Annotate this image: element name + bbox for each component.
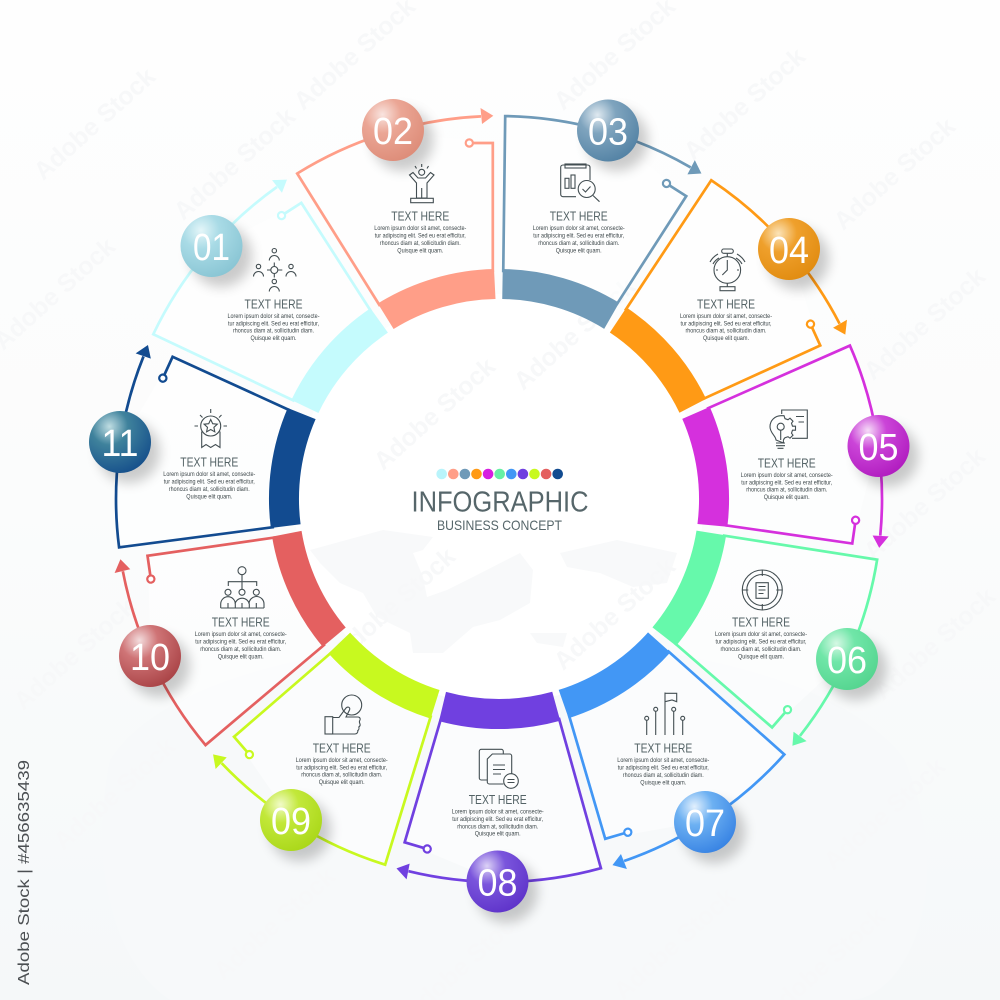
ball 10 xyxy=(119,625,190,697)
icon: people network xyxy=(254,248,296,292)
text block 06 xyxy=(715,616,807,660)
panel 06 xyxy=(630,458,927,752)
text block 07: tur adipiscing elit. Sed eu erat efficitur, xyxy=(618,765,709,772)
text block 04: Lorem ipsum dolor sit amet, consecte- xyxy=(680,313,772,320)
text block 05: rhoncus diam at, sollicitudin diam. xyxy=(746,487,827,494)
panel 10 outline and band xyxy=(112,527,359,754)
watermark: Adobe Stock xyxy=(329,542,461,666)
text block 10: tur adipiscing elit. Sed eu erat efficitur, xyxy=(195,639,286,646)
panel 02 outline and band xyxy=(297,108,496,329)
text block 08: tur adipiscing elit. Sed eu erat efficitur, xyxy=(452,816,543,823)
text block 01: Lorem ipsum dolor sit amet, consecte- xyxy=(228,313,320,320)
ball 05 xyxy=(848,415,918,487)
icon: winner on podium xyxy=(410,164,434,203)
watermark: Adobe Stock xyxy=(859,262,991,386)
text block 06: tur adipiscing elit. Sed eu erat efficitur, xyxy=(716,639,807,646)
watermark: Adobe Stock xyxy=(29,62,161,186)
text block 08: TEXT HERE xyxy=(469,793,527,807)
text block 06: rhoncus diam at, sollicitudin diam. xyxy=(720,646,802,653)
text block 03: rhoncus diam at, sollicitudin diam. xyxy=(538,240,619,247)
panel 07 xyxy=(550,605,803,873)
text block 01: rhoncus diam at, sollicitudin diam. xyxy=(233,328,314,335)
text block 11: Quisque elit quam. xyxy=(186,493,233,500)
ball 11: 11 xyxy=(102,423,138,465)
panel 04 outline and band xyxy=(570,153,853,425)
panel 02 xyxy=(297,99,496,329)
text block 11: tur adipiscing elit. Sed eu erat efficitur, xyxy=(164,479,255,486)
panel 05 xyxy=(668,323,918,551)
text block 08: rhoncus diam at, sollicitudin diam. xyxy=(457,823,538,830)
text block 10: Quisque elit quam. xyxy=(218,653,264,660)
watermark: Adobe Stock xyxy=(49,732,181,856)
text block 09: tur adipiscing elit. Sed eu erat efficitur, xyxy=(296,764,387,771)
colour dots xyxy=(436,469,563,479)
text block 05 xyxy=(741,456,833,501)
text block 03: tur adipiscing elit. Sed eu erat efficitur, xyxy=(533,233,624,240)
heading: INFOGRAPHIC xyxy=(412,486,588,518)
ball 02 xyxy=(362,99,434,171)
watermark: Adobe Stock xyxy=(869,582,1000,706)
text block 10: rhoncus diam at, sollicitudin diam. xyxy=(200,646,281,653)
watermark: Adobe Stock xyxy=(679,42,811,166)
panel 09 outline and band xyxy=(206,613,503,908)
ball 02: 02 xyxy=(373,111,413,153)
watermark: Adobe Stock xyxy=(829,112,961,236)
ball 03 xyxy=(577,100,648,171)
ball 10: 10 xyxy=(130,637,170,679)
ball 03: 03 xyxy=(588,112,628,154)
watermark: Adobe Stock xyxy=(169,102,301,226)
panel 04 xyxy=(570,153,853,425)
panel 07 outline and band xyxy=(550,605,803,873)
watermark: Adobe Stock xyxy=(209,862,341,986)
text block 04 xyxy=(680,297,772,342)
text block 02 xyxy=(374,210,466,254)
text block 11: rhoncus diam at, sollicitudin diam. xyxy=(169,486,250,493)
text block 05: TEXT HERE xyxy=(758,456,816,470)
ball 07 xyxy=(674,791,745,863)
ball 01: 01 xyxy=(193,227,230,269)
text block 09 xyxy=(296,741,388,786)
panel 10 xyxy=(112,527,359,754)
text block 02: tur adipiscing elit. Sed eu erat efficitur, xyxy=(375,233,466,240)
text block 11: Lorem ipsum dolor sit amet, consecte- xyxy=(163,471,255,478)
text block 04: TEXT HERE xyxy=(697,297,755,311)
center title xyxy=(412,469,588,533)
panel 11 outline and band xyxy=(60,340,343,612)
text block 07: rhoncus diam at, sollicitudin diam. xyxy=(623,772,704,779)
text block 07 xyxy=(617,742,709,786)
text block 02: Lorem ipsum dolor sit amet, consecte- xyxy=(374,225,466,232)
text block 09: Lorem ipsum dolor sit amet, consecte- xyxy=(296,757,388,764)
text block 02: rhoncus diam at, sollicitudin diam. xyxy=(380,240,461,247)
icon: bulb with gear xyxy=(770,410,807,448)
ball 01 xyxy=(180,215,252,287)
panel 05 outline and band xyxy=(668,323,915,551)
subheading: BUSINESS CONCEPT xyxy=(437,517,562,533)
icon: thumbs up with coin xyxy=(325,695,362,734)
text block 08 xyxy=(452,793,544,838)
ball 08: 08 xyxy=(478,862,518,904)
text block 01: TEXT HERE xyxy=(244,297,302,311)
text block 04: Quisque elit quam. xyxy=(703,335,749,342)
icon: report with magnifier xyxy=(561,164,600,202)
text block 01 xyxy=(228,297,320,342)
panel 03 outline and band xyxy=(421,61,707,354)
text block 03: Quisque elit quam. xyxy=(556,247,602,254)
ball 05: 05 xyxy=(858,427,898,469)
text block 04: tur adipiscing elit. Sed eu erat efficitur, xyxy=(680,320,772,327)
text block 03: Lorem ipsum dolor sit amet, consecte- xyxy=(533,225,625,232)
text block 09: rhoncus diam at, sollicitudin diam. xyxy=(301,772,382,779)
text block 05: Lorem ipsum dolor sit amet, consecte- xyxy=(741,472,833,479)
panel 06 outline and band xyxy=(630,458,927,752)
stock id label: Adobe Stock | #456635439 xyxy=(16,760,33,985)
panel 09 xyxy=(206,613,503,908)
text block 07: Lorem ipsum dolor sit amet, consecte- xyxy=(617,757,709,764)
ball 04 xyxy=(758,218,829,290)
panel 01 outline and band xyxy=(118,172,404,465)
text block 10: TEXT HERE xyxy=(212,616,270,630)
text block 05: tur adipiscing elit. Sed eu erat efficitur, xyxy=(741,479,832,486)
ball 09 xyxy=(260,789,331,861)
watermark: Adobe Stock xyxy=(369,352,501,476)
text block 08: Lorem ipsum dolor sit amet, consecte- xyxy=(452,808,544,816)
text block 01: Quisque elit quam. xyxy=(250,335,297,342)
ball 06: 06 xyxy=(827,640,867,682)
text block 05: Quisque elit quam. xyxy=(764,494,810,501)
panel 08 xyxy=(392,663,645,931)
icon: team hierarchy xyxy=(221,567,264,608)
text block 10 xyxy=(195,616,287,660)
text block 02: TEXT HERE xyxy=(391,210,449,224)
text block 03: TEXT HERE xyxy=(550,210,608,224)
text block 04: rhoncus diam at, sollicitudin diam. xyxy=(686,328,767,335)
text block 11 xyxy=(163,456,255,500)
ball 06 xyxy=(816,628,887,700)
panel 01 xyxy=(118,172,404,465)
text block 09: TEXT HERE xyxy=(313,741,371,755)
text block 06: TEXT HERE xyxy=(732,616,790,630)
text block 06: Lorem ipsum dolor sit amet, consecte- xyxy=(715,631,807,638)
watermark: Adobe Stock xyxy=(859,442,991,566)
text block 01: tur adipiscing elit. Sed eu erat efficitur, xyxy=(228,320,319,327)
panel 03 xyxy=(421,61,707,354)
watermark: Adobe Stock xyxy=(819,752,951,876)
text block 08: Quisque elit quam. xyxy=(475,831,521,838)
ball 09: 09 xyxy=(271,801,311,843)
ball 07: 07 xyxy=(685,803,725,845)
icon: milestones with flag xyxy=(645,692,685,735)
watermark: Adobe Stock xyxy=(549,552,681,676)
icon: award badge xyxy=(194,409,227,448)
icon: target document xyxy=(742,570,782,610)
watermark: Adobe Stock xyxy=(9,592,141,716)
ball 04: 04 xyxy=(769,230,809,272)
ball 11 xyxy=(89,411,160,483)
text block 07: Quisque elit quam. xyxy=(640,779,687,786)
watermark: Adobe Stock xyxy=(509,272,641,396)
panel 11 xyxy=(60,340,343,612)
text block 03 xyxy=(533,210,625,254)
text block 07: TEXT HERE xyxy=(634,742,692,756)
panel 08 outline and band xyxy=(392,663,645,931)
text block 11: TEXT HERE xyxy=(180,456,238,470)
ball 08 xyxy=(466,850,538,922)
text block 09: Quisque elit quam. xyxy=(319,779,365,786)
text block 06: Quisque elit quam. xyxy=(738,653,784,660)
text block 02: Quisque elit quam. xyxy=(397,247,444,254)
icon: documents xyxy=(479,749,518,788)
text block 10: Lorem ipsum dolor sit amet, consecte- xyxy=(195,631,287,638)
icon: stopwatch xyxy=(710,249,745,291)
